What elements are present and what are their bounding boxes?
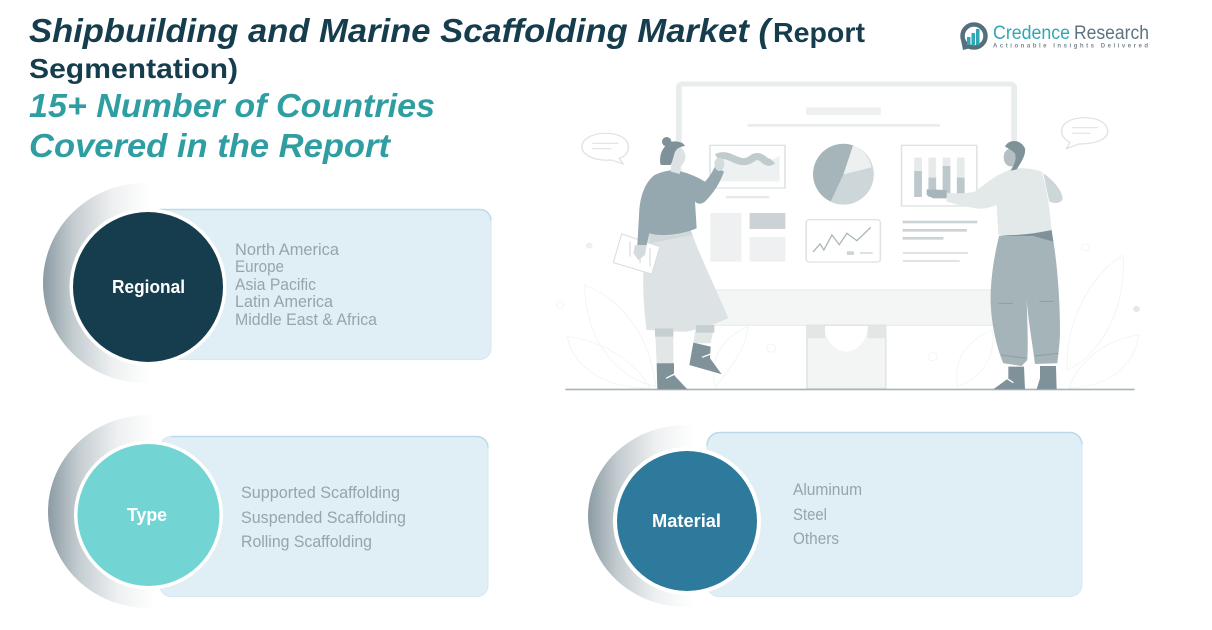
- hand: [927, 189, 947, 198]
- subtitle: [29, 88, 435, 165]
- card: Regional: [150, 210, 491, 360]
- subtitle: Covered in the Report: [29, 128, 392, 165]
- monitor: [679, 84, 1014, 389]
- logo: Credence Research: [961, 23, 1149, 50]
- list: Regional: Asia Pacific: [235, 276, 316, 294]
- card: Type: [160, 436, 488, 596]
- logo: Credence Research: Credence: [993, 23, 1070, 44]
- line chart panel: [806, 220, 880, 262]
- badge: Regional: Regional: [112, 277, 185, 297]
- background leaves: [557, 244, 1138, 388]
- shoes: [993, 366, 1057, 389]
- icon: logo mark: [961, 24, 986, 50]
- skirt: [643, 230, 728, 332]
- list: Regional: Europe: [235, 258, 284, 276]
- list: Type: Supported Scaffolding: [241, 484, 400, 502]
- speech bubbles: [582, 118, 1108, 164]
- badge: Type: Type: [127, 505, 167, 525]
- block tiles: [710, 213, 785, 262]
- list: Regional: [235, 241, 378, 329]
- list: Type: [241, 484, 406, 551]
- title: Report: [773, 17, 865, 48]
- pie chart: [813, 144, 874, 205]
- list: Regional: Middle East & Africa: [235, 311, 378, 329]
- shirt: [947, 168, 1052, 235]
- head: [1004, 148, 1018, 166]
- list: Material: Aluminum: [793, 481, 862, 499]
- badge: Type: [74, 440, 223, 590]
- figure: man: [927, 141, 1063, 389]
- sweater: [637, 167, 724, 245]
- list: Regional: Latin America: [235, 293, 334, 311]
- title: Segmentation): [29, 53, 238, 84]
- panel: Material: [588, 425, 1082, 607]
- panel: Regional: [43, 183, 491, 383]
- hands: [633, 245, 647, 260]
- title: [29, 13, 865, 84]
- crescent: Material: [588, 425, 784, 607]
- title: Shipbuilding and Marine Scaffolding Market (: [29, 13, 774, 50]
- panel: Type: [48, 415, 488, 608]
- logo: Credence Research: Actionable Insights Delivered: [993, 44, 1148, 50]
- ground line: [565, 389, 1135, 390]
- area chart: [710, 145, 785, 198]
- text lines: [903, 221, 977, 262]
- head: [671, 163, 680, 174]
- paper: [613, 234, 660, 274]
- list: Type: Suspended Scaffolding: [241, 509, 406, 527]
- badge: Regional: [70, 208, 226, 366]
- legs: [655, 325, 714, 363]
- crescent: Regional: [43, 183, 247, 383]
- list: Material: [793, 481, 862, 548]
- list: Regional: North America: [235, 241, 340, 259]
- crescent: Type: [48, 415, 248, 608]
- trousers: [991, 232, 1060, 366]
- screen and scenery: [557, 84, 1140, 390]
- illustration: presentation at monitor: [557, 84, 1140, 390]
- screen header bars: [748, 107, 940, 127]
- list: Material: Others: [793, 530, 839, 548]
- bar chart panel: [902, 145, 977, 206]
- subtitle: 15+ Number of Countries: [29, 88, 435, 125]
- figure: woman: [613, 137, 728, 389]
- logo: Credence Research: Research: [1074, 23, 1149, 44]
- list: Type: Rolling Scaffolding: [241, 533, 372, 551]
- badge: Material: [613, 447, 761, 595]
- shoes: [657, 363, 687, 389]
- badge: Material: Material: [652, 511, 721, 531]
- card: Material: [707, 432, 1082, 596]
- list: Material: Steel: [793, 506, 827, 524]
